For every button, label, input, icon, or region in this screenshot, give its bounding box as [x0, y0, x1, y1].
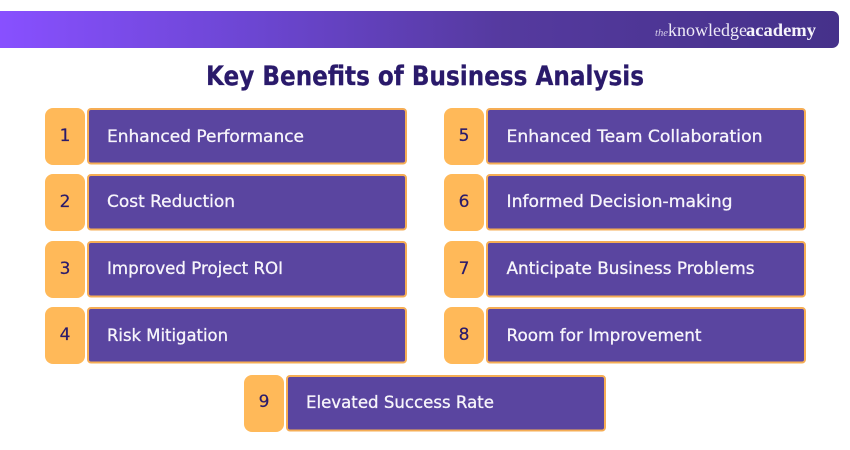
item 5: 5	[459, 126, 469, 146]
item 5: Enhanced Team Collaboration	[506, 127, 762, 147]
item 4: 4	[60, 325, 70, 345]
logo: the knowledge academy: academy	[746, 20, 816, 40]
item 2	[45, 174, 406, 231]
item 6	[444, 174, 805, 231]
item 9: Elevated Success Rate	[306, 393, 494, 413]
item 1: Enhanced Performance	[107, 127, 304, 147]
item 9: 9	[259, 392, 269, 412]
item 7: 7	[459, 259, 469, 279]
item 9	[244, 375, 605, 432]
item 1	[45, 108, 406, 165]
item 6: 6	[459, 192, 469, 212]
item 2: Cost Reduction	[107, 192, 235, 212]
item 3: 3	[60, 259, 70, 279]
item 8	[444, 307, 805, 364]
title: Key Benefits of Business Analysis	[206, 61, 644, 92]
item 1: 1	[60, 126, 70, 146]
item 7: Anticipate Business Problems	[506, 259, 755, 279]
item 4: Risk Mitigation	[107, 326, 228, 346]
item 4	[45, 307, 406, 364]
item 3	[45, 241, 406, 298]
item 8: Room for Improvement	[506, 326, 702, 346]
item 7	[444, 241, 805, 298]
item 2: 2	[60, 192, 70, 212]
item 5	[444, 108, 805, 165]
logo: the knowledge academy: the	[655, 27, 668, 39]
logo: the knowledge academy	[655, 20, 816, 40]
item 6: Informed Decision-making	[506, 192, 732, 212]
item 3: Improved Project ROI	[107, 259, 283, 279]
header banner	[0, 11, 839, 48]
item 8: 8	[459, 325, 469, 345]
logo: the knowledge academy: knowledge	[668, 20, 747, 40]
